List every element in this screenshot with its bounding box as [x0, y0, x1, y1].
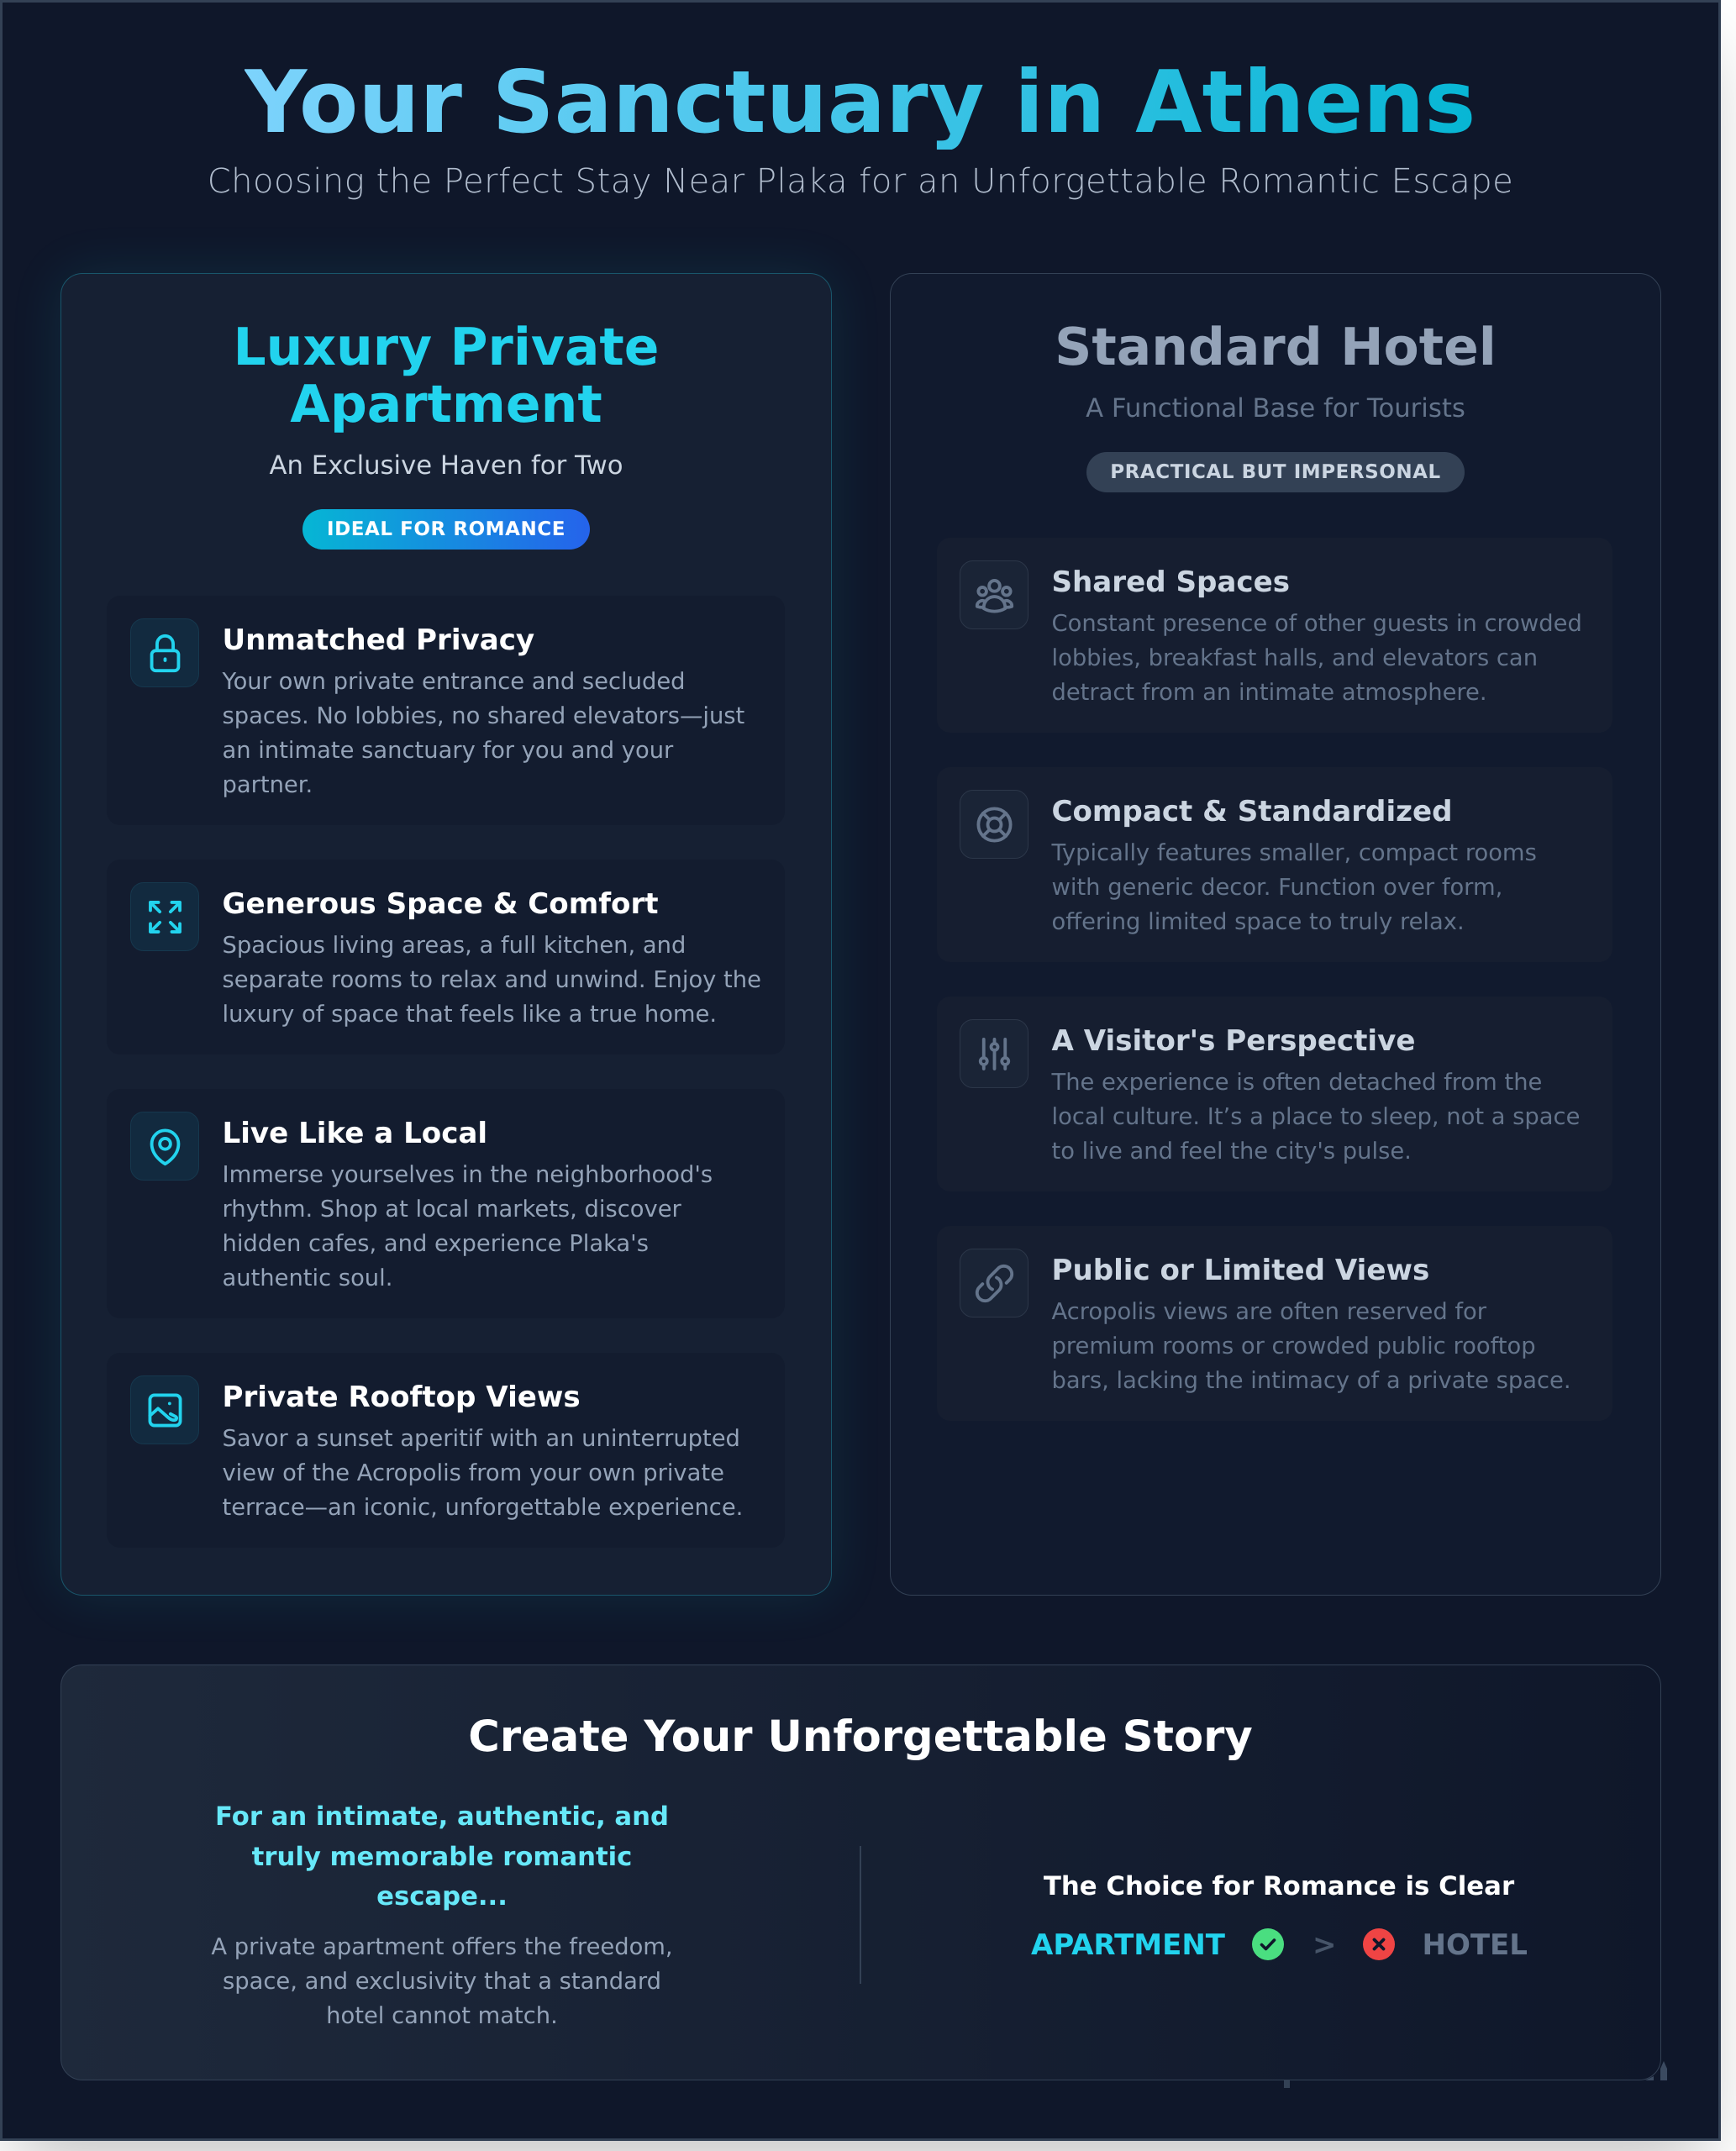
badge: ideal for romance	[302, 509, 590, 550]
feature title: Generous Space & Comfort	[222, 887, 659, 921]
feature text: an intimate sanctuary for you and your	[222, 738, 673, 764]
feature text: partner.	[222, 772, 313, 798]
feature: shared spaces	[937, 538, 1612, 733]
feature: public or limited views	[937, 1226, 1612, 1421]
feature text: to live and feel the city's pulse.	[1052, 1139, 1412, 1165]
feature text	[1051, 840, 1537, 935]
apartment heading	[234, 318, 659, 434]
feature text: premium rooms or crowded public rooftop	[1052, 1333, 1536, 1359]
hotel subheading: A Functional Base for Tourists	[1086, 394, 1465, 423]
feature text: with generic decor. Function over form,	[1052, 875, 1502, 901]
feature text: Your own private entrance and secluded	[222, 669, 686, 695]
icon: lock	[130, 618, 199, 687]
feature title: Public or Limited Views	[1052, 1254, 1429, 1287]
icon: map pin	[130, 1112, 199, 1181]
feature: private rooftop views	[107, 1353, 785, 1548]
feature text	[1052, 1299, 1571, 1394]
verdict row	[1031, 1927, 1528, 1961]
feature text: Typically features smaller, compact rooms	[1052, 840, 1537, 866]
feature: unmatched privacy	[107, 596, 785, 825]
summary text: hotel cannot match.	[326, 2003, 558, 2028]
apartment label: APARTMENT	[1031, 1927, 1225, 1961]
feature: generous space	[107, 860, 785, 1054]
feature: visitor's perspective	[937, 997, 1612, 1191]
icon: green check	[1252, 1928, 1284, 1960]
feature text: authentic soul.	[222, 1265, 392, 1291]
panel: summary	[60, 1665, 1660, 2080]
feature text: spaces. No lobbies, no shared elevators—just	[222, 703, 744, 729]
feature title: A Visitor's Perspective	[1052, 1024, 1415, 1058]
feature text: Acropolis views are often reserved for	[1052, 1299, 1486, 1325]
icon: chain link	[960, 1249, 1028, 1317]
feature text	[1051, 1070, 1580, 1165]
feature: live like a local	[107, 1089, 785, 1318]
summary text	[211, 1934, 673, 2028]
feature text	[222, 1426, 743, 1521]
feature title: Unmatched Privacy	[222, 623, 534, 657]
feature text: separate rooms to relax and unwind. Enjoy the	[222, 967, 761, 993]
hotel label: HOTEL	[1422, 1927, 1528, 1961]
summary heading: Create Your Unforgettable Story	[468, 1712, 1253, 1762]
icon: expand arrows	[130, 882, 199, 951]
verdict heading: The Choice for Romance is Clear	[1044, 1870, 1514, 1901]
summary callout: truly memorable romantic	[252, 1842, 632, 1872]
title: Your Sanctuary in Athens	[245, 53, 1476, 153]
subtitle: Choosing the Perfect Stay Near Plaka for an Unforgettable Romantic Escape	[208, 161, 1513, 200]
icon: picture	[130, 1375, 199, 1444]
icon: lifebuoy	[960, 790, 1028, 859]
feature text: detract from an intimate atmosphere.	[1052, 680, 1487, 706]
icon: red cross	[1363, 1928, 1395, 1960]
feature text: view of the Acropolis from your own private	[222, 1460, 724, 1486]
greater-than sign: >	[1313, 1927, 1336, 1961]
feature text: Immerse yourselves in the neighborhood's	[222, 1162, 713, 1188]
feature text: local culture. It’s a place to sleep, not a space	[1052, 1104, 1580, 1130]
divider	[860, 1846, 861, 1984]
icon: group of people	[960, 560, 1028, 629]
panel: luxury private apartment	[60, 272, 832, 1595]
apartment subheading: An Exclusive Haven for Two	[269, 450, 623, 481]
feature title: Shared Spaces	[1052, 565, 1290, 599]
feature text: hidden cafes, and experience Plaka's	[222, 1231, 649, 1257]
badge: practical but impersonal	[1086, 452, 1465, 492]
feature title: Compact & Standardized	[1052, 795, 1452, 828]
feature: compact and standardized	[937, 767, 1612, 962]
summary callout	[215, 1802, 669, 1912]
feature text: Spacious living areas, a full kitchen, and	[222, 933, 686, 959]
summary callout: escape...	[376, 1882, 508, 1912]
watermark remnant behind summary panel	[1284, 2061, 1667, 2088]
apartment heading: Luxury Private	[234, 318, 659, 376]
feature text: Constant presence of other guests in crowded	[1052, 611, 1582, 637]
feature text: offering limited space to truly relax.	[1052, 909, 1465, 935]
badge: ideal for romance: IDEAL FOR ROMANCE	[327, 518, 566, 540]
feature title: Private Rooftop Views	[222, 1381, 581, 1414]
feature text: luxury of space that feels like a true home.	[222, 1002, 717, 1028]
feature text	[222, 933, 761, 1028]
hotel heading: Standard Hotel	[1055, 318, 1497, 376]
apartment heading: Apartment	[290, 375, 602, 434]
feature text	[1052, 611, 1582, 706]
summary text: space, and exclusivity that a standard	[223, 1968, 661, 1995]
summary callout: For an intimate, authentic, and	[215, 1802, 669, 1832]
feature text: The experience is often detached from the	[1052, 1070, 1542, 1096]
feature text	[222, 1162, 713, 1291]
panel: standard hotel	[889, 272, 1660, 1595]
badge: practical but impersonal: PRACTICAL BUT IMPERSONAL	[1110, 461, 1441, 483]
feature title: Live Like a Local	[222, 1117, 487, 1150]
feature text: Savor a sunset aperitif with an uninterrupted	[222, 1426, 740, 1452]
feature text: bars, lacking the intimacy of a private space.	[1052, 1368, 1571, 1394]
feature text: rhythm. Shop at local markets, discover	[222, 1196, 681, 1223]
summary text: A private apartment offers the freedom,	[211, 1934, 673, 1959]
feature text	[222, 669, 744, 798]
feature text: terrace—an iconic, unforgettable experience.	[222, 1495, 743, 1521]
feature text: lobbies, breakfast halls, and elevators can	[1052, 645, 1538, 671]
icon: sliders	[960, 1019, 1028, 1088]
